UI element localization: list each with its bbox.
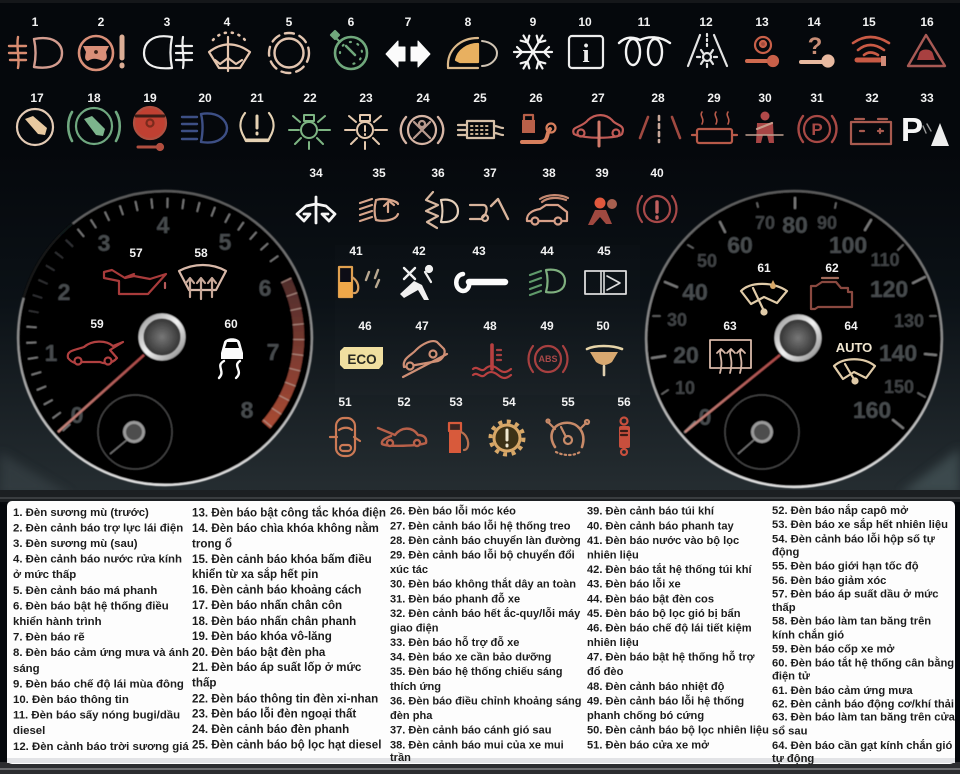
legend column 3: thích ứng <box>390 681 441 693</box>
icon 57: oil pressure: 57 <box>129 246 143 260</box>
legend column 5: 58. Đèn báo làm tan băng trên <box>772 616 931 628</box>
icon 55: speed limiter: 55 <box>561 395 575 409</box>
warning icons <box>9 15 949 456</box>
icon 23: exterior light fault <box>345 91 387 149</box>
legend column 2: khiển từ xa sắp hết pin <box>192 568 318 581</box>
speedometer gauge: 40 <box>682 279 708 305</box>
icon 44: low beam <box>530 244 565 295</box>
legend column 5: 52. Đèn báo nắp capô mở <box>772 504 908 517</box>
icon 40: handbrake warning: 40 <box>650 166 664 180</box>
icon 8: rain and light sensor <box>448 15 497 68</box>
icon 37: rear spoiler: 37 <box>483 166 497 180</box>
icon 25: diesel particulate filter <box>458 91 503 138</box>
legend column 3: 37. Đèn cảnh báo cánh gió sau <box>390 724 552 736</box>
icon 5: brake pad warning: 5 <box>286 15 293 29</box>
legend column 5 <box>772 504 956 765</box>
icon 41: water in fuel: 41 <box>349 244 363 258</box>
speedometer gauge: 100 <box>829 232 867 258</box>
legend column 4: 44. Đèn báo bật đèn cos <box>587 593 714 605</box>
icon 29: catalytic converter: 29 <box>707 91 721 105</box>
icon 60: stability off: 60 <box>224 317 238 331</box>
legend column 5: 64. Đèn báo cần gạt kính chắn gió <box>772 739 952 752</box>
icon 53: low fuel <box>449 395 468 453</box>
legend column 1: khiển hành trình <box>13 616 102 628</box>
icon 51: door open <box>330 395 360 456</box>
legend column 3: 38. Đèn cảnh báo mui của xe mui <box>390 740 564 752</box>
legend column 2: 15. Đèn cảnh báo khóa bấm điều <box>192 553 372 566</box>
icon 9: winter mode <box>514 15 552 71</box>
legend column 1: 8. Đèn báo cảm ứng mưa và ánh <box>13 647 189 659</box>
icon 31: parking brake: 31 <box>810 91 824 105</box>
icon 46: eco mode: ECO <box>347 352 377 367</box>
legend column 2: 17. Đèn báo nhấn chân côn <box>192 599 342 612</box>
legend column 4: 49. Đèn cảnh báo lỗi hệ thống <box>587 694 744 707</box>
legend column 1: 4. Đèn cảnh báo nước rửa kính <box>13 554 182 566</box>
legend column 5: 62. Đèn cảnh báo động cơ/khí thải <box>772 698 954 710</box>
speedometer gauge: 20 <box>673 342 699 368</box>
legend column 5: điện tử <box>772 671 811 683</box>
icon 58: windshield defrost: 58 <box>194 246 208 260</box>
legend column 2: 23. Đèn báo lỗi đèn ngoại thất <box>192 708 356 720</box>
legend column 1 <box>13 507 189 753</box>
icon 62: engine warning <box>811 261 852 309</box>
icon 58: windshield defrost <box>179 246 226 299</box>
icon 20: high beam <box>182 91 227 143</box>
tachometer gauge: 5 <box>219 229 232 255</box>
icon 24: brake light warning <box>401 91 443 144</box>
speedometer gauge: 150 <box>884 377 914 397</box>
legend column 3: xúc tác <box>390 564 428 576</box>
icon 2: power steering warning: 2 <box>98 15 105 29</box>
legend column 3: 32. Đèn cảnh báo hết ắc-quy/lỗi máy <box>390 607 581 620</box>
legend column 3: 31. Đèn báo phanh đỗ xe <box>390 592 520 605</box>
legend column 2: 16. Đèn cảnh báo khoảng cách <box>192 584 361 596</box>
legend column 5: 59. Đèn báo cốp xe mở <box>772 643 894 655</box>
icon 51: door open: 51 <box>338 395 352 409</box>
icon 3: rear fog light: 3 <box>164 15 171 29</box>
icon 12: frost warning road <box>688 15 727 67</box>
legend column 2: 19. Đèn báo khóa vô-lăng <box>192 630 332 643</box>
legend column 4 <box>587 506 769 752</box>
legend column 4: 41. Đèn báo nước vào bộ lọc <box>587 535 739 547</box>
icon 64: auto wiper <box>834 319 875 384</box>
icon 9: winter mode: 9 <box>530 15 537 29</box>
icon 25: diesel particulate filter: 25 <box>473 91 487 105</box>
legend column 4: 50. Đèn cảnh báo bộ lọc nhiên liệu <box>587 724 769 736</box>
icon 23: exterior light fault: 23 <box>359 91 373 105</box>
legend column 4: 46. Đèn báo chế độ lái tiết kiệm <box>587 622 752 634</box>
speedometer gauge: 80 <box>782 212 808 238</box>
icon 28: lane departure: 28 <box>651 91 665 105</box>
icon 54: automatic transmission fault: 54 <box>502 395 516 409</box>
tachometer gauge <box>18 191 312 485</box>
legend column 5: 60. Đèn báo tắt hệ thống cân bằng <box>772 656 954 669</box>
icon 24: brake light warning: 24 <box>416 91 430 105</box>
icon 32: battery <box>851 91 891 144</box>
legend column 4: phanh chống bó cứng <box>587 710 704 722</box>
legend column 1: 7. Đèn báo rẽ <box>13 632 85 644</box>
icon 42: airbag off <box>400 244 432 300</box>
legend column 3: 30. Đèn báo không thắt dây an toàn <box>390 578 576 591</box>
icon 46: eco mode <box>340 319 383 369</box>
icon 39: airbag <box>588 166 617 225</box>
legend column 3: 34. Đèn báo xe cần bảo dưỡng <box>390 652 552 664</box>
icon 33: parking assist <box>901 91 949 148</box>
legend column 5: sổ sau <box>772 726 808 738</box>
icon 8: rain and light sensor: 8 <box>465 15 472 29</box>
legend panel <box>7 501 956 765</box>
icon 53: low fuel: 53 <box>449 395 463 409</box>
speedometer gauge: 120 <box>870 276 908 302</box>
icon 41: water in fuel <box>339 244 379 297</box>
icon 12: frost warning road: 12 <box>699 15 713 29</box>
tachometer gauge: 6 <box>259 275 271 301</box>
legend column 2: 13. Đèn báo bật công tắc khóa điện <box>192 506 386 520</box>
icon 11: glow plug <box>619 15 670 65</box>
icon 20: high beam: 20 <box>198 91 212 105</box>
legend column 5: động <box>772 547 800 559</box>
icon 30: seat belt: 30 <box>758 91 772 105</box>
legend column 5: 63. Đèn báo làm tan băng trên cửa <box>772 712 956 724</box>
icon 56: shock absorber <box>617 395 631 455</box>
icon 60: stability off <box>219 317 243 378</box>
speedometer gauge <box>646 191 942 487</box>
icon 26: tow hook <box>522 91 556 142</box>
legend column 3: 26. Đèn báo lỗi móc kéo <box>390 505 516 518</box>
legend column 2: 21. Đèn báo áp suất lốp ở mức <box>192 661 362 674</box>
icon 34: service due: 34 <box>309 166 323 180</box>
legend column 4: nhiên liệu <box>587 550 639 562</box>
legend column 5: thấp <box>772 602 796 614</box>
legend column 2: 18. Đèn báo nhấn chân phanh <box>192 615 356 628</box>
icon 13: ignition switch key <box>747 15 778 66</box>
icon 49: ABS warning: 49 <box>540 319 554 333</box>
icon 49: ABS warning: ABS <box>538 354 558 364</box>
legend column 3: 27. Đèn cảnh báo lỗi hệ thống treo <box>390 519 571 532</box>
icon 31: parking brake: P <box>811 120 823 139</box>
icon 32: battery: 32 <box>865 91 879 105</box>
icon 34: service due <box>297 166 335 223</box>
legend column 1: sáng <box>13 663 40 675</box>
legend column 5: 55. Đèn báo giới hạn tốc độ <box>772 561 919 573</box>
icon 4: washer fluid low: 4 <box>224 15 231 29</box>
icon 56: shock absorber: 56 <box>617 395 631 409</box>
icon 47: hill descent: 47 <box>415 319 429 333</box>
legend column 5: 53. Đèn báo xe sắp hết nhiên liệu <box>772 518 948 531</box>
speedometer gauge: 70 <box>755 213 775 233</box>
icon 64: auto wiper: 64 <box>844 319 858 333</box>
legend column 1: 9. Đèn báo chế độ lái mùa đông <box>13 678 184 690</box>
legend column 1: 10. Đèn báo thông tin <box>13 694 129 706</box>
speedometer gauge: 90 <box>817 213 837 233</box>
legend column 5: tự động <box>772 753 814 765</box>
speedometer gauge: 60 <box>727 232 753 258</box>
tachometer gauge: 2 <box>58 279 70 305</box>
icon 17: clutch pedal <box>17 91 53 145</box>
legend column 2: thấp <box>192 676 216 690</box>
legend column 4: 39. Đèn cảnh báo túi khí <box>587 506 715 518</box>
legend column 1: 11. Đèn báo sấy nóng bugi/dầu <box>13 710 180 722</box>
icon 57: oil pressure <box>104 246 166 294</box>
icon 36: headlight range <box>426 166 458 228</box>
icon 37: rear spoiler <box>470 166 508 221</box>
icon 14: key not in ignition: 14 <box>807 15 821 29</box>
legend column 1: 1. Đèn sương mù (trước) <box>13 507 149 519</box>
speedometer gauge: 30 <box>667 310 687 330</box>
legend column 3: 33. Đèn báo hỗ trợ đỗ xe <box>390 636 519 649</box>
icon 38: convertible roof: 38 <box>542 166 556 180</box>
icon 61: rain sensor <box>741 261 787 314</box>
icon 63: rear defrost: 63 <box>723 319 737 333</box>
legend column 5: 61. Đèn báo cảm ứng mưa <box>772 685 913 697</box>
legend column 3: giao điện <box>390 622 439 634</box>
icon 54: automatic transmission fault <box>490 395 524 454</box>
legend column 5: kính chắn gió <box>772 629 844 642</box>
icon 33: parking assist: P <box>901 111 923 148</box>
icon 19: steering lock: 19 <box>143 91 157 105</box>
icon 49: ABS warning <box>528 319 568 372</box>
icon 17: clutch pedal: 17 <box>30 91 44 105</box>
icon 10: information: 10 <box>578 15 592 29</box>
icon 31: parking brake <box>798 91 836 142</box>
icon 44: low beam: 44 <box>540 244 554 258</box>
legend column 3 <box>390 505 582 764</box>
icon 21: tyre pressure: 21 <box>250 91 264 105</box>
icon 33: parking assist: 33 <box>920 91 934 105</box>
icon 3: rear fog light <box>144 15 192 68</box>
legend column 3: 29. Đèn cảnh báo lỗi bộ chuyển đổi <box>390 548 575 562</box>
icon 50: fuel filter: 50 <box>596 319 610 333</box>
icon 39: airbag: 39 <box>595 166 609 180</box>
icon 45: air filter: 45 <box>597 244 611 258</box>
speedometer gauge: 110 <box>870 250 900 270</box>
icon 64: auto wiper: AUTO <box>836 340 872 355</box>
icon 6: cruise control: 6 <box>348 15 355 29</box>
icon 43: spanner: 43 <box>472 244 486 258</box>
icon 38: convertible roof <box>527 166 568 224</box>
icon 16: distance warning <box>908 15 945 66</box>
icon 40: handbrake warning <box>638 166 676 222</box>
icon 52: bonnet open <box>378 395 426 446</box>
icon 1: front fog light <box>9 15 62 68</box>
icon 26: tow hook: 26 <box>529 91 543 105</box>
speedometer gauge: 140 <box>879 340 917 366</box>
icon 2: power steering warning <box>79 15 122 70</box>
legend column 4: 47. Đèn báo bật hệ thống hỗ trợ <box>587 650 755 664</box>
legend column 1: 5. Đèn cảnh báo má phanh <box>13 585 157 597</box>
legend column 1: 6. Đèn báo bật hệ thống điều <box>13 600 169 612</box>
icon 30: seat belt <box>746 91 783 143</box>
icon 59: trunk open: 59 <box>90 317 104 331</box>
tachometer gauge: 3 <box>98 230 110 256</box>
legend column 2: 22. Đèn báo thông tin đèn xi-nhan <box>192 692 378 706</box>
icon 61: rain sensor: 61 <box>757 261 771 275</box>
icon 55: speed limiter <box>546 395 589 455</box>
icon 10: information: i <box>582 39 590 68</box>
icon 13: ignition switch key: 13 <box>755 15 769 29</box>
legend column 4: 40. Đèn cảnh báo phanh tay <box>587 520 735 532</box>
icon 7: turn signals <box>386 15 430 67</box>
icon 47: hill descent <box>403 319 447 377</box>
icon 63: rear defrost <box>710 319 751 373</box>
tachometer gauge: 0 <box>71 402 83 428</box>
speedometer gauge: 160 <box>853 397 891 423</box>
tachometer gauge: 7 <box>267 339 279 365</box>
icon 19: steering lock <box>134 91 166 150</box>
legend column 1: diesel <box>13 725 45 737</box>
legend column 4: 51. Đèn báo cửa xe mở <box>587 740 709 752</box>
icon 15: remote key battery: 15 <box>862 15 876 29</box>
tachometer gauge: 8 <box>241 397 254 423</box>
icon 45: air filter <box>585 244 626 294</box>
legend column 3: đèn pha <box>390 710 433 722</box>
legend column 2: 14. Đèn báo chìa khóa không nằm <box>192 522 379 535</box>
legend column 4: nhiên liệu <box>587 637 639 649</box>
icon 59: trunk open <box>68 317 123 364</box>
icon 15: remote key battery <box>853 15 889 66</box>
legend column 4: 42. Đèn báo tắt hệ thống túi khí <box>587 563 752 576</box>
speedometer gauge: 0 <box>699 404 711 430</box>
icon 28: lane departure <box>640 91 680 142</box>
legend column 1: 12. Đèn cảnh báo trời sương giá <box>13 741 189 753</box>
legend column 4: 43. Đèn báo lỗi xe <box>587 578 681 591</box>
legend column 4: đổ đèo <box>587 666 624 678</box>
icon 35: adaptive lighting <box>360 166 398 221</box>
icon 18: brake pedal: 18 <box>87 91 101 105</box>
icon 50: fuel filter <box>587 319 622 375</box>
legend column 4: 48. Đèn cảnh báo nhiệt độ <box>587 681 725 693</box>
legend column 2: 25. Đèn cảnh báo bộ lọc hạt diesel <box>192 738 381 752</box>
icon 21: tyre pressure <box>240 91 274 141</box>
icon 11: glow plug: 11 <box>638 15 651 29</box>
legend column 1: 2. Đèn cảnh báo trợ lực lái điện <box>13 523 183 535</box>
legend column 2 <box>192 506 386 752</box>
legend column 5: 56. Đèn báo giảm xóc <box>772 575 886 587</box>
legend column 3: trần <box>390 752 411 764</box>
icon 42: airbag off: 42 <box>412 244 426 258</box>
legend column 4: 45. Đèn báo bộ lọc gió bị bẩn <box>587 608 741 620</box>
icon 27: suspension fault: 27 <box>591 91 605 105</box>
icon 35: adaptive lighting: 35 <box>372 166 386 180</box>
speedometer gauge: 50 <box>697 251 717 271</box>
speedometer gauge: 10 <box>675 378 695 398</box>
legend column 5: 57. Đèn báo áp suất dầu ở mức <box>772 589 939 601</box>
icon 4: washer fluid low <box>209 15 250 71</box>
icon 43: spanner <box>456 244 505 291</box>
icon 1: front fog light: 1 <box>32 15 39 29</box>
legend column 3: 35. Đèn báo hệ thống chiếu sáng <box>390 666 563 678</box>
legend column 2: 20. Đèn báo bật đèn pha <box>192 646 326 659</box>
icon 22: signal light info: 22 <box>303 91 317 105</box>
icon 6: cruise control <box>331 15 367 69</box>
icon 36: headlight range: 36 <box>431 166 445 180</box>
icon 16: distance warning: 16 <box>920 15 934 29</box>
tachometer gauge: 1 <box>45 340 58 366</box>
icon 10: information <box>569 15 603 68</box>
icon 48: coolant temperature <box>473 319 511 378</box>
icon 7: turn signals: 7 <box>405 15 412 29</box>
icon 27: suspension fault <box>573 91 623 146</box>
icon 5: brake pad warning <box>269 15 309 73</box>
icon 22: signal light info <box>289 91 330 149</box>
icon 14: key not in ignition: ? <box>808 33 822 60</box>
legend column 2: 24. Đèn cảnh báo đèn phanh <box>192 723 349 736</box>
legend column 1: ở mức thấp <box>13 569 76 581</box>
icon 52: bonnet open: 52 <box>397 395 411 409</box>
legend column 2: trong ổ <box>192 538 232 550</box>
legend column 3: 36. Đèn báo điều chỉnh khoảng sáng <box>390 695 582 707</box>
icon 48: coolant temperature: 48 <box>483 319 497 333</box>
icon 46: eco mode: 46 <box>358 319 372 333</box>
tachometer gauge: 4 <box>157 212 170 238</box>
legend column 3: 28. Đèn cảnh báo chuyển làn đường <box>390 535 581 547</box>
icon 18: brake pedal <box>68 91 120 144</box>
icon 62: engine warning: 62 <box>825 261 839 275</box>
legend column 1: 3. Đèn sương mù (sau) <box>13 538 138 550</box>
icon 29: catalytic converter <box>692 91 737 143</box>
speedometer gauge: 130 <box>894 311 924 331</box>
icon 14: key not in ignition <box>801 15 834 66</box>
legend column 5: 54. Đèn cảnh báo lỗi hộp số tự <box>772 532 936 545</box>
